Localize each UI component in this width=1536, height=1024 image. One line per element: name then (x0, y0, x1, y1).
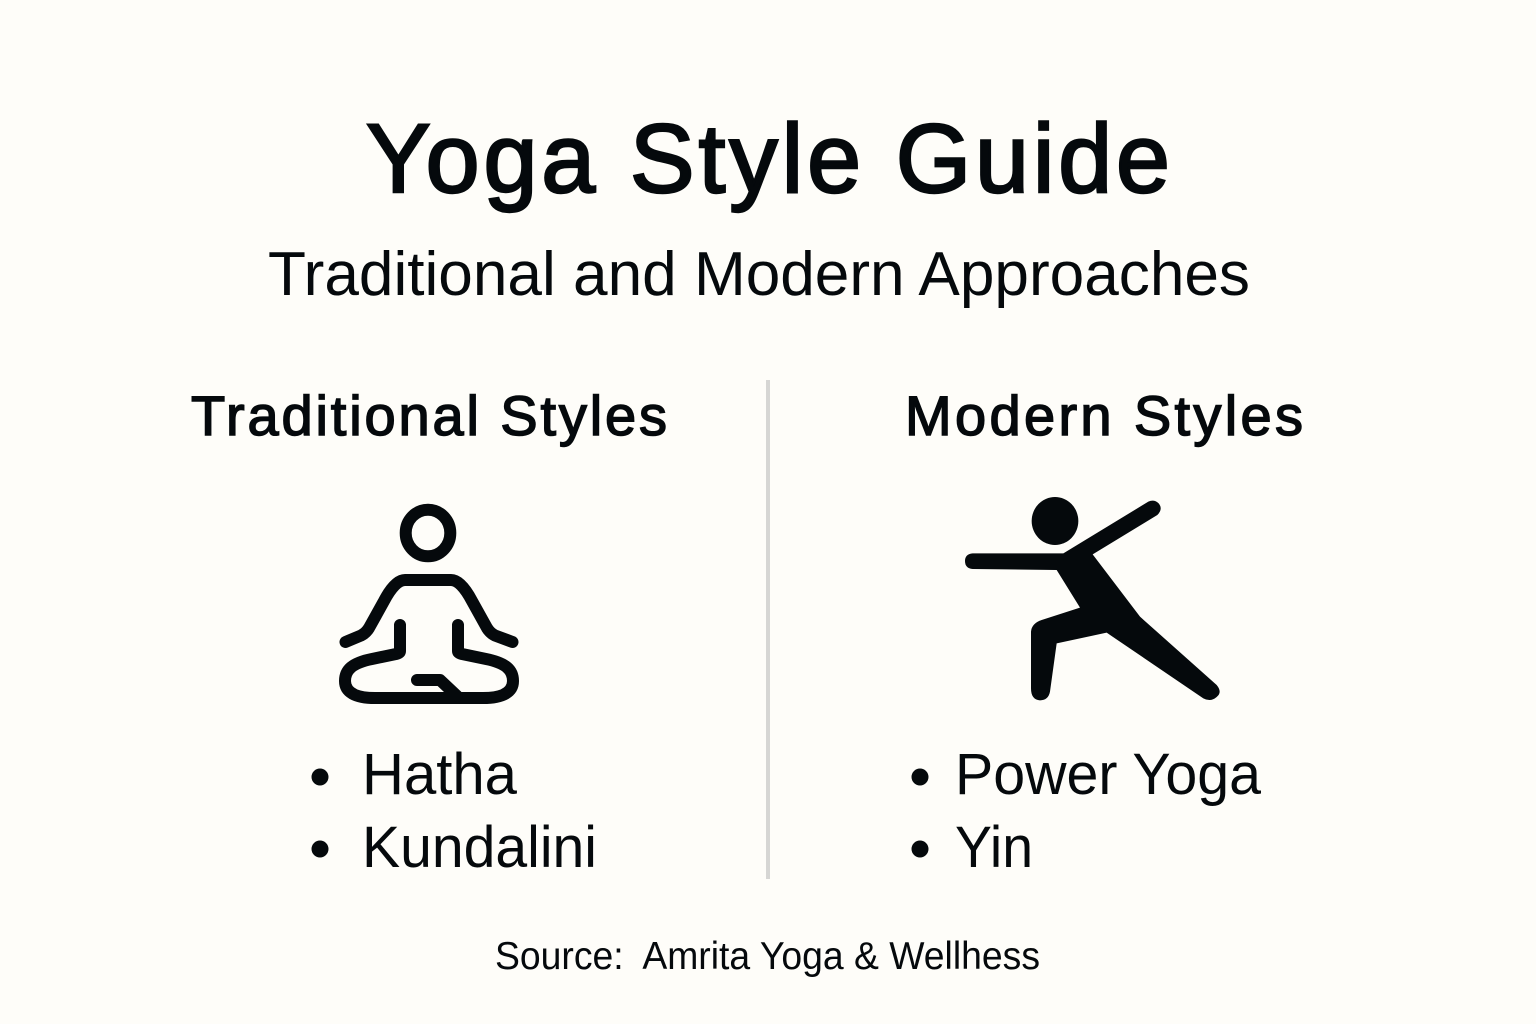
bullet: Power Yoga (912, 768, 928, 786)
item: Yin: Yin (955, 815, 1033, 880)
icon: seated meditation figure (345, 510, 513, 698)
bullet: Yin (912, 840, 928, 858)
item: Kundalini: Kundalini (362, 815, 597, 880)
panel: traditional styles (191, 384, 667, 880)
bullet: Hatha (312, 768, 328, 786)
title: Yoga Style Guide (366, 104, 1170, 213)
item: Hatha: Hatha (362, 742, 518, 807)
icon: warrior pose figure (965, 497, 1220, 700)
subtitle: Traditional and Modern Approaches (268, 240, 1250, 309)
heading: traditional styles: Traditional Styles (191, 384, 667, 447)
source line: Source: Amrita Yoga & Wellhess (495, 935, 1040, 978)
item: Power Yoga: Power Yoga (955, 742, 1262, 807)
list: traditional styles (312, 742, 597, 880)
list: modern styles (912, 742, 1262, 880)
heading: modern styles: Modern Styles (905, 384, 1303, 447)
panel: modern styles (905, 384, 1303, 880)
bullet: Kundalini (312, 840, 328, 858)
